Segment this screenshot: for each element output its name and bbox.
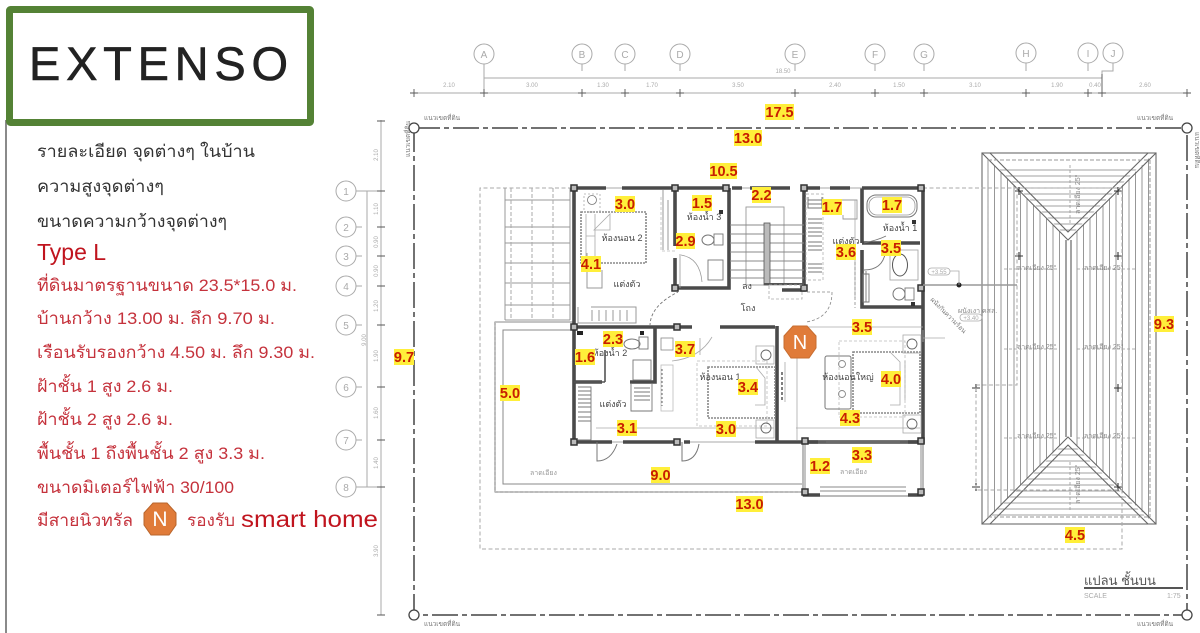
dimension labels: 3.7 (675, 342, 695, 358)
column grid axis: 1.50 (893, 83, 905, 89)
row grid axis: 1.40 (374, 457, 380, 469)
specifications list: ที่ดินมาตรฐานขนาด 23.5*15.0 ม. (37, 273, 297, 296)
row grid axis (336, 120, 385, 615)
dimension labels: 1.7 (822, 200, 842, 216)
dimension labels: 9.3 (1154, 317, 1174, 333)
row grid axis: 1.90 (374, 350, 380, 362)
terrace and balcony outline (495, 322, 867, 492)
dimension labels: 4.1 (581, 257, 601, 273)
bathroom 2 and closet (574, 331, 920, 461)
dimension labels: 1.5 (692, 196, 712, 212)
balcony (802, 438, 924, 496)
specifications list: พื้นชั้น 1 ถึงพื้นชั้น 2 สูง 3.3 ม. (37, 441, 265, 464)
dimension labels: 9.7 (394, 350, 414, 366)
row grid axis: 8 (343, 483, 349, 494)
N marker on plan (784, 326, 816, 358)
bathroom 2 and closet: ห้องน้ำ 2 (593, 346, 627, 358)
type heading: Type L (37, 239, 106, 265)
roof overhang outline (480, 188, 1122, 549)
plan title (1084, 571, 1183, 600)
smart home line: มีสายนิวทรัล (37, 511, 133, 530)
bedroom 2 furniture (578, 190, 678, 326)
column grid axis: 18.50 (775, 69, 791, 75)
upper terrace slats (505, 188, 570, 320)
column grid axis: F (872, 50, 878, 61)
specifications list (37, 273, 315, 497)
bedroom 2 furniture: ห้องนอน 2 (602, 233, 642, 243)
row grid axis: 1 (343, 187, 349, 198)
master bedroom furniture (782, 327, 945, 440)
dimension labels: 3.6 (836, 245, 856, 261)
row grid axis: 1.20 (374, 300, 380, 312)
row grid axis: 7 (343, 436, 349, 447)
plan title: แปลน ชั้นบน (1084, 571, 1156, 588)
left edge rule (5, 120, 7, 633)
smart home line (37, 503, 378, 535)
roof plan: ลาดเอียง 25° (1074, 174, 1082, 214)
dimension labels: 3.5 (881, 241, 901, 257)
dimension labels: 3.4 (738, 380, 758, 396)
bathroom 3 fixtures (680, 210, 723, 288)
dimension labels: 3.5 (852, 320, 872, 336)
smart home line: รองรับ (187, 511, 235, 530)
dimension labels (394, 104, 1174, 544)
stairs (730, 207, 804, 299)
roof plan: ลาดเอียง 25° (1084, 264, 1124, 272)
column grid axis: 2.60 (1139, 83, 1151, 89)
dimension labels: 13.0 (734, 131, 762, 147)
dimension labels: 10.5 (709, 164, 738, 180)
closet and bathroom 1 fixtures (806, 194, 1017, 335)
dimension labels: 13.0 (735, 497, 764, 513)
row grid axis: 4 (343, 282, 349, 293)
column grid axis: A (481, 50, 488, 61)
dimension labels: 3.1 (617, 421, 637, 437)
logo box: EXTENSO (29, 37, 288, 90)
property boundary: แนวเขตที่ดิน (424, 113, 461, 122)
column grid axis: 3.50 (732, 83, 744, 89)
column grid axis: D (676, 50, 684, 61)
column grid axis: 2.40 (829, 83, 841, 89)
dimension labels: 1.7 (882, 198, 902, 214)
closet and bathroom 1 fixtures: +3.55 (931, 270, 947, 276)
roof plan: ลาดเอียง 25° (1074, 464, 1082, 504)
intro text block: ขนาดความกว้างจุดต่างๆ (37, 212, 227, 232)
roof plan: ลาดเอียง 25° (1017, 264, 1057, 272)
dimension labels: 1.6 (575, 350, 595, 366)
column grid axis (410, 43, 1191, 97)
row grid axis: 1.10 (374, 203, 380, 215)
plan title: SCALE (1084, 593, 1107, 600)
dimension labels: 5.0 (500, 386, 520, 402)
property boundary: แนวเขตที่ดิน (1137, 619, 1174, 628)
row grid axis: 1.60 (374, 407, 380, 419)
specifications list: ขนาดมิเตอร์ไฟฟ้า 30/100 (37, 477, 234, 497)
column grid axis: 0.40 (1089, 83, 1101, 89)
property boundary: แนวเขตที่ดิน (424, 619, 461, 628)
dimension labels: 2.9 (675, 234, 696, 250)
dimension labels: 17.5 (765, 105, 794, 121)
roof plan: ลาดเอียง 25° (1017, 432, 1057, 440)
row grid axis: 3.90 (374, 545, 380, 557)
column grid axis: B (579, 50, 586, 61)
dimension labels: 9.0 (650, 468, 671, 484)
roof plan: ลาดเอียง 25° (1084, 432, 1124, 440)
dimension labels: 3.0 (716, 422, 736, 438)
closet and bathroom 1 fixtures: ผนังกันความร้อน (929, 296, 968, 335)
lobby label: โถง (741, 303, 755, 313)
column grid axis: 1.30 (597, 83, 609, 89)
plan title: 1:75 (1167, 593, 1181, 600)
row grid axis: 2.10 (374, 149, 380, 161)
dimension labels: 1.2 (810, 459, 830, 475)
terrace and balcony outline: ลาดเอียง (530, 469, 557, 477)
column grid axis: 1.90 (1051, 83, 1063, 89)
roof plan (972, 153, 1156, 524)
dimension labels: 4.5 (1065, 528, 1085, 544)
property boundary: แนวเขตที่ดิน (1193, 132, 1200, 169)
dimension labels: 2.3 (603, 332, 623, 348)
intro text block: ความสูงจุดต่างๆ (37, 177, 164, 197)
property boundary: แนวเขตที่ดิน (1137, 113, 1174, 122)
closet and bathroom 1 fixtures: ผนังเงา คสล. (958, 307, 997, 315)
row grid axis: 5 (343, 321, 349, 332)
intro text block: รายละเอียด จุดต่างๆ ในบ้าน (37, 141, 255, 162)
column grid axis: G (920, 50, 928, 61)
roof plan: ลาดเอียง 25° (1084, 343, 1124, 351)
dimension labels: 3.3 (852, 448, 872, 464)
specifications list: ฝ้าชั้น 2 สูง 2.6 ม. (37, 407, 173, 430)
row grid axis: 0.90 (374, 265, 380, 277)
bedroom 1 furniture (697, 346, 775, 438)
smart home line: N (152, 508, 168, 531)
dimension labels: 2.2 (751, 188, 772, 204)
row grid axis: 6 (343, 383, 349, 394)
logo box (10, 10, 310, 122)
column grid axis: E (792, 50, 799, 61)
property boundary: แนวเขตที่ดิน (403, 120, 412, 157)
stairs: ลง (742, 281, 752, 291)
roof plan: ลาดเอียง 25° (1017, 343, 1057, 351)
bathroom 3 fixtures: ห้องน้ำ 3 (687, 210, 721, 222)
bathroom 2 and closet: แต่งตัว (600, 399, 626, 409)
first bedroom block walls (571, 185, 924, 445)
specifications list: ฝ้าชั้น 1 สูง 2.6 ม. (37, 374, 173, 397)
row grid axis: 2 (343, 223, 349, 234)
bedroom 1 furniture: ห้องนอน 1 (700, 372, 740, 382)
row grid axis: 3 (343, 252, 349, 263)
dimension labels: 4.0 (881, 372, 901, 388)
column grid axis: 1.70 (646, 83, 658, 89)
terrace and balcony outline: ลาดเอียง (840, 468, 867, 476)
column grid axis: 3.00 (526, 83, 538, 89)
property boundary (403, 113, 1200, 628)
column grid axis: 2.10 (443, 83, 455, 89)
specifications list: บ้านกว้าง 13.00 ม. ลึก 9.70 ม. (37, 309, 275, 328)
closet and bathroom 1 fixtures: แต่งตัว (833, 236, 859, 246)
closet and bathroom 1 fixtures: +3.40 (963, 316, 979, 322)
dimension labels: 4.3 (840, 411, 860, 427)
intro text block (37, 141, 255, 232)
column grid axis: 3.10 (969, 83, 981, 89)
row grid axis: 0.90 (374, 236, 380, 248)
row grid axis: 9.00 (362, 334, 368, 346)
column grid axis: I (1087, 49, 1089, 60)
bedroom 2 furniture: แต่งตัว (614, 279, 640, 289)
N marker on plan: N (793, 332, 807, 354)
master bedroom furniture: ห้องนอนใหญ่ (822, 372, 874, 382)
column grid axis: H (1022, 49, 1030, 60)
column grid axis: C (621, 50, 629, 61)
column grid axis: J (1110, 49, 1116, 60)
closet and bathroom 1 fixtures: ห้องน้ำ 1 (883, 221, 917, 233)
dimension labels: 3.0 (615, 197, 635, 213)
smart home line: smart home (241, 506, 378, 532)
specifications list: เรือนรับรองกว้าง 4.50 ม. ลึก 9.30 ม. (37, 343, 315, 362)
